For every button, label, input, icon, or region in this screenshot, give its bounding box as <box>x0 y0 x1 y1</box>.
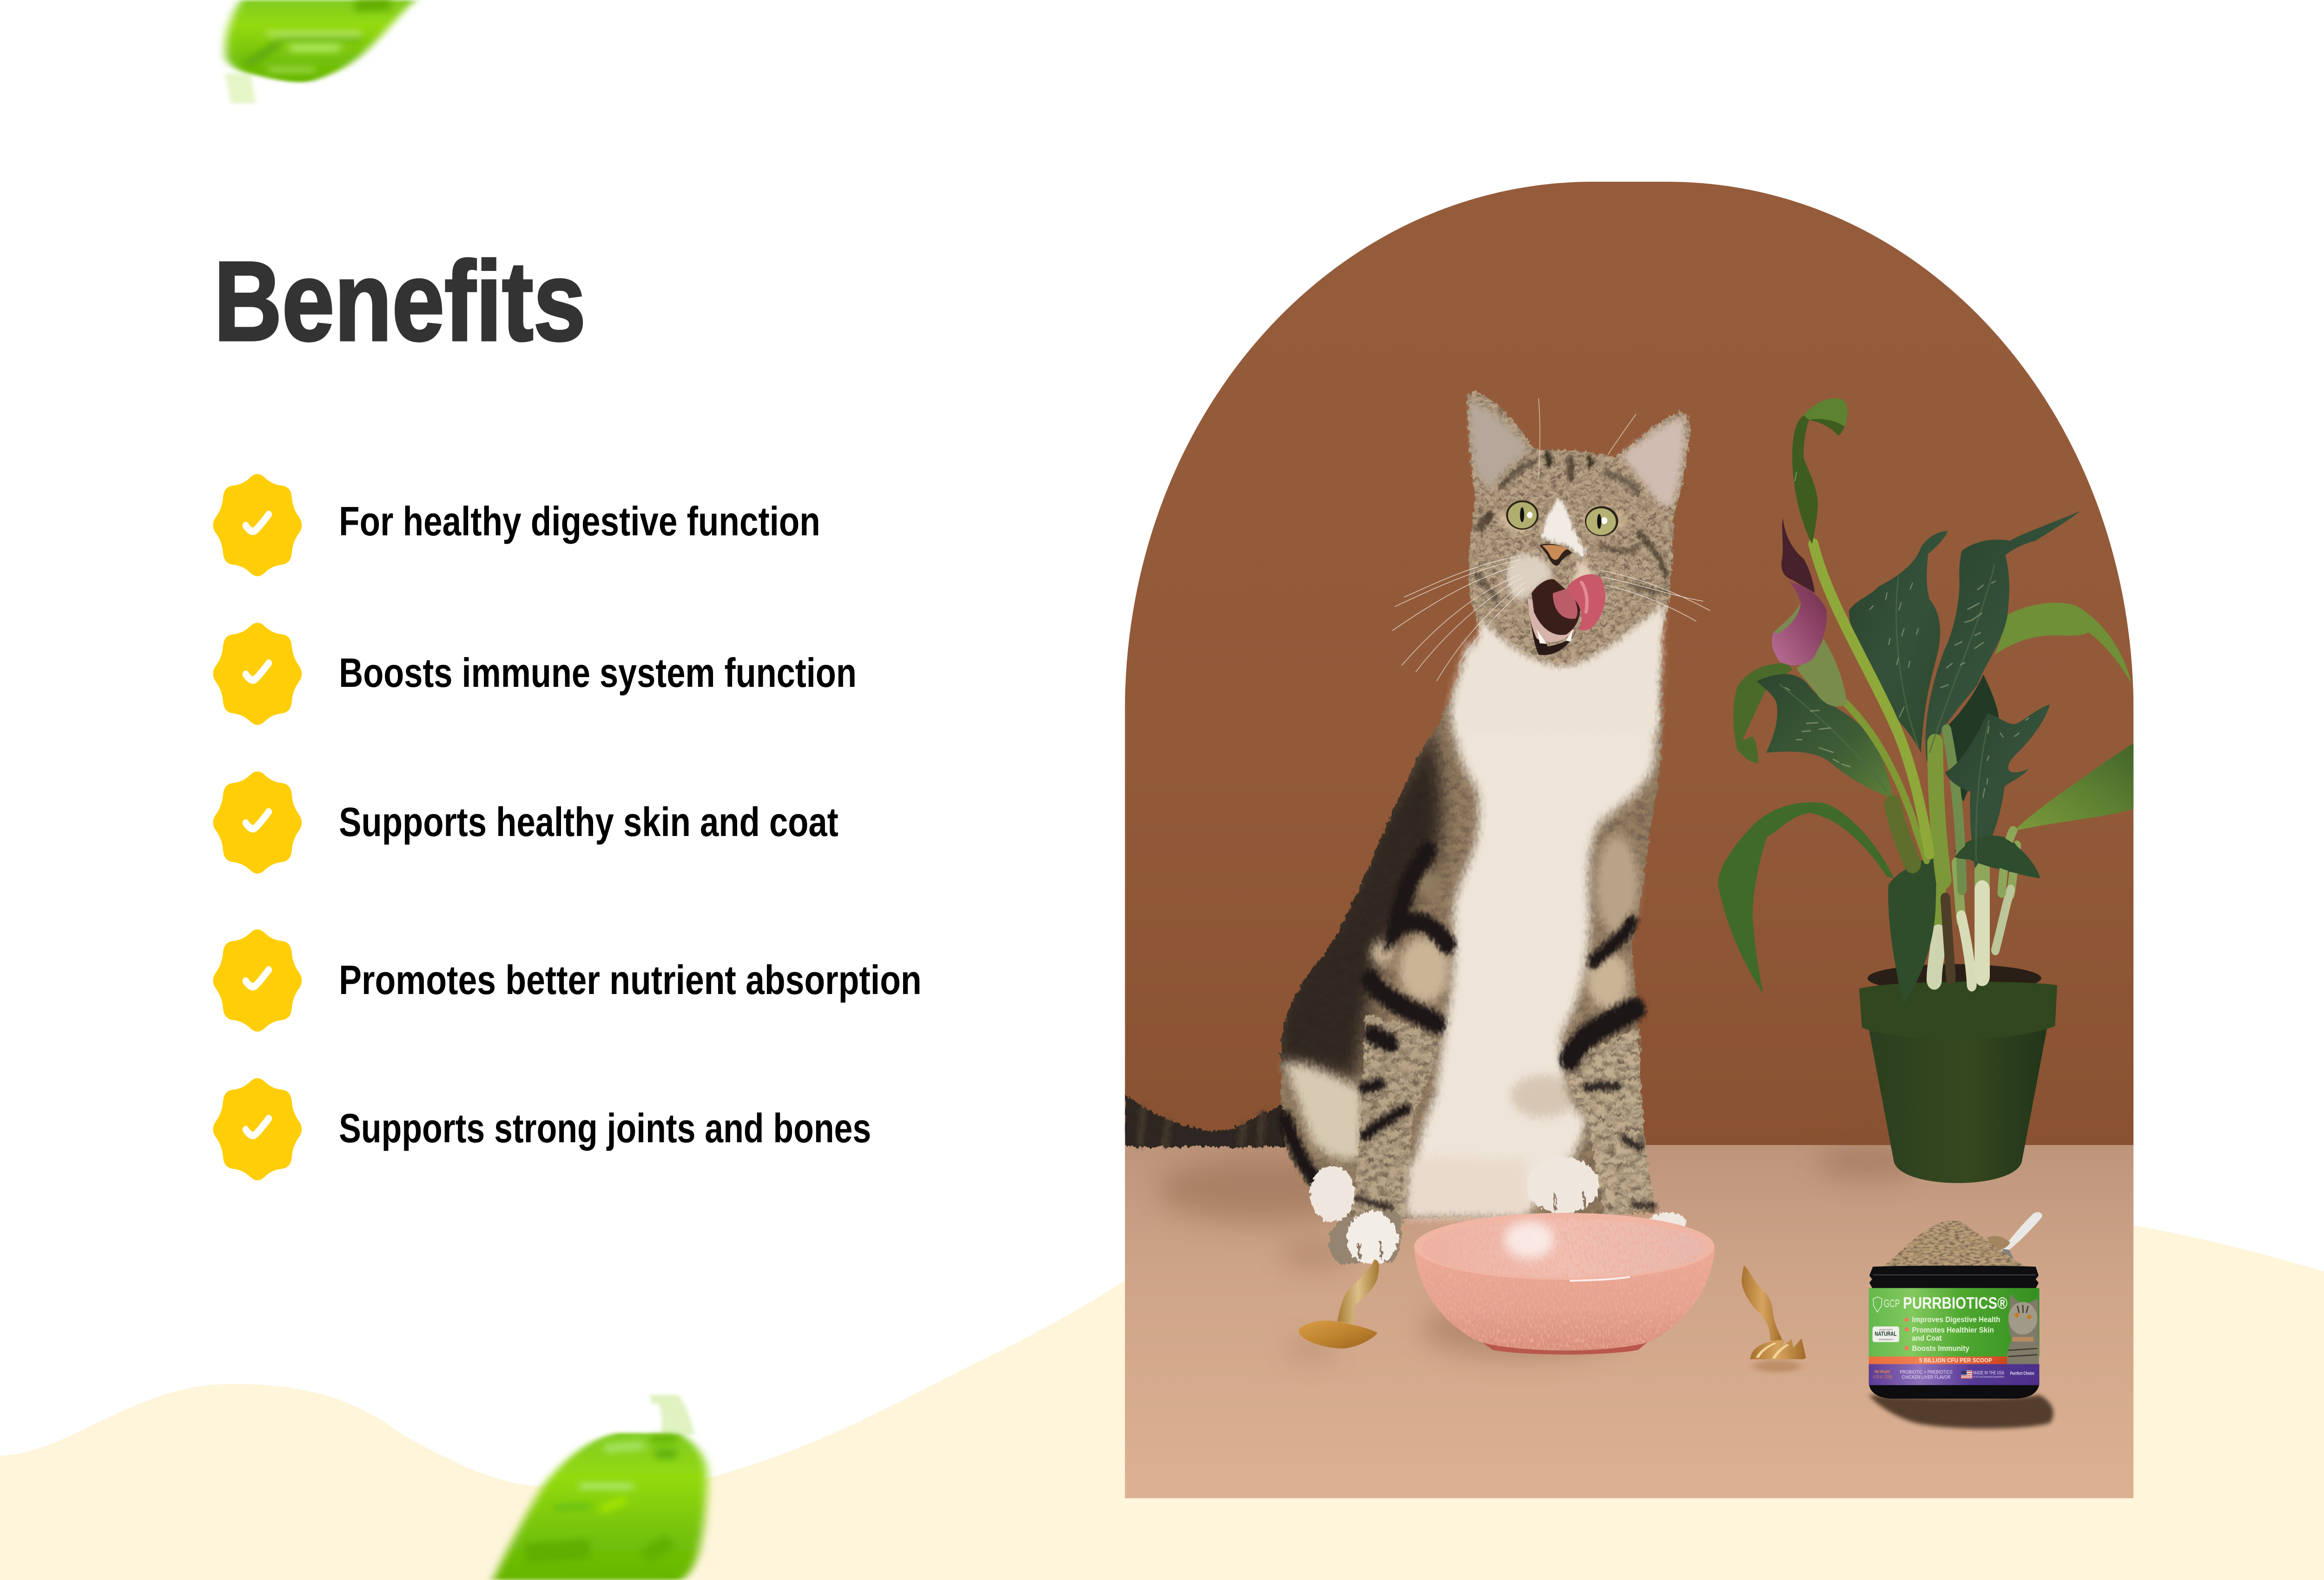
product jar: PURRBIOTICS® <box>1903 1294 2007 1312</box>
flower pink petal <box>1772 581 1827 665</box>
icon: check badge <box>213 771 302 874</box>
purple band text: PROBIOTIC + PREBIOTICS <box>1900 1369 1953 1375</box>
back dark leaf <box>1946 674 1999 802</box>
icon: brand shield <box>1873 1297 1882 1312</box>
cat face details <box>1393 398 1710 681</box>
tongue main <box>1568 574 1605 631</box>
benefit item 5 <box>213 1078 871 1180</box>
fork <box>1742 1265 1806 1372</box>
bowl highlight <box>1504 1221 1554 1258</box>
purple band text: 4.23 oz. (120g) <box>1873 1374 1892 1379</box>
eye left <box>1506 500 1538 530</box>
nose <box>1540 544 1572 566</box>
flower: calla lily <box>1772 518 1848 706</box>
label green <box>1869 1288 2040 1356</box>
spoon handle <box>1337 1259 1379 1324</box>
cat <box>1125 392 1710 1265</box>
flower dark back petal <box>1782 518 1815 593</box>
plant pot and soil <box>1859 836 2057 1183</box>
label orange band <box>1869 1356 2007 1364</box>
pot rim <box>1859 981 2057 1040</box>
jar benefits text: and Coat <box>1912 1334 1942 1343</box>
purple band text: CHICKEN LIVER FLAVOR <box>1901 1375 1951 1380</box>
purple band text: of US and imported ingredients <box>1973 1376 2004 1379</box>
right front paw <box>1527 1157 1599 1214</box>
jar benefits text: Boosts Immunity <box>1912 1344 1969 1353</box>
leaf stem top <box>225 73 256 104</box>
leaf highlights top <box>246 5 390 70</box>
benefit item 4 <box>213 929 922 1032</box>
background wave <box>0 1225 2324 1580</box>
body tabby base <box>1281 644 1663 1221</box>
flower spathe <box>1796 639 1848 706</box>
purple band text <box>1873 1369 2034 1380</box>
centre leaf <box>1849 531 1948 753</box>
soil <box>1868 964 2041 992</box>
natural badge: INGREDIENTS <box>1879 1338 1893 1341</box>
whiskers <box>1393 398 1710 681</box>
CFU text: 5 BILLION CFU PER SCOOP <box>1919 1357 1992 1364</box>
spoon head <box>1299 1321 1378 1349</box>
jar benefits text: Promotes Healthier Skin <box>1912 1325 1994 1334</box>
lower front leaf <box>1888 853 1937 1005</box>
tongue base <box>1553 588 1578 619</box>
bowl rim glint <box>1570 1277 1630 1281</box>
open mouth <box>1527 574 1605 655</box>
back-left paw <box>1310 1165 1355 1222</box>
bowl interior <box>1414 1213 1714 1280</box>
icon: check badge <box>213 474 302 576</box>
far-right paw <box>1649 1212 1686 1231</box>
foreleg right <box>1568 1030 1655 1217</box>
benefit item 2 <box>213 623 857 725</box>
white blaze <box>1541 497 1585 557</box>
natural badge <box>1873 1326 1899 1342</box>
leaf speckles <box>1785 472 2028 797</box>
icon: check badge <box>213 929 302 1032</box>
shadows on table <box>1158 1146 1921 1357</box>
fork shadow <box>1754 1360 1801 1372</box>
small left curl leaf <box>1733 663 1792 763</box>
eye right <box>1585 506 1618 536</box>
body dark flank <box>1273 727 1442 1080</box>
purple band text: Net Weight: <box>1875 1369 1890 1374</box>
icon: check badge <box>213 623 302 725</box>
natural badge: NATURAL <box>1875 1330 1897 1337</box>
flower inner <box>1774 603 1801 634</box>
foreleg left <box>1352 1013 1439 1229</box>
panel: arched photo scene <box>1125 182 2136 1498</box>
leaf midribs <box>1780 564 1994 860</box>
jar lid <box>1869 1265 2039 1288</box>
right lower dark leaf <box>1945 704 2050 869</box>
curled top leaf <box>1792 398 1848 544</box>
cat head fur <box>1457 392 1690 732</box>
benefit text 5: Supports strong joints and bones <box>339 1106 871 1151</box>
belly bottom <box>1406 1157 1529 1217</box>
cat fur layers <box>1125 392 1690 1265</box>
jar benefits text <box>1912 1315 2000 1353</box>
green stem bases <box>1938 837 2017 939</box>
forehead markings <box>1476 456 1666 601</box>
pot body <box>1868 1022 2048 1183</box>
product jar <box>1869 1212 2053 1429</box>
benefit item 3 <box>213 771 838 874</box>
leaf highlights bottom <box>525 1439 677 1557</box>
left front paw tabby <box>1329 1211 1402 1264</box>
benefit text 4: Promotes better nutrient absorption <box>339 957 922 1003</box>
light cheek and blaze <box>1497 510 1626 601</box>
natural badge: MADE WITH <box>1879 1329 1893 1331</box>
leaf: bottom blurred <box>493 1395 707 1580</box>
spoon <box>1299 1259 1379 1349</box>
jar brand text: GCP <box>1884 1297 1900 1310</box>
mouth cavity <box>1532 579 1580 635</box>
jar shadow <box>1869 1395 2053 1429</box>
teeth <box>1537 629 1573 644</box>
title: Benefits <box>214 238 586 364</box>
benefit item 1 <box>213 474 820 576</box>
belly shading <box>1511 1075 1576 1117</box>
bowl foot <box>1477 1338 1652 1355</box>
white chin and throat <box>1457 604 1664 732</box>
near small leaf <box>1955 836 2040 878</box>
benefit text 1: For healthy digestive function <box>339 499 820 544</box>
label cat <box>2007 1293 2039 1364</box>
wall <box>1125 182 2133 1148</box>
jar bullets <box>1904 1317 1909 1350</box>
left big leaf <box>1757 674 1893 798</box>
table <box>1125 1145 2133 1498</box>
purple band text: MADE IN THE USA <box>1973 1370 2005 1376</box>
benefit text 3: Supports healthy skin and coat <box>339 799 838 845</box>
paws <box>1310 1157 1686 1265</box>
ear inner right <box>1621 418 1684 507</box>
scoop <box>1987 1212 2042 1259</box>
cat body <box>1273 644 1686 1265</box>
arched pale right leaf <box>1994 603 2132 684</box>
benefits list <box>213 474 922 1180</box>
lower side leaf <box>1954 836 2040 877</box>
cat tail <box>1125 1094 1287 1147</box>
lower-left arching leaf <box>1718 802 1894 994</box>
tabby stripes <box>1286 851 1655 1208</box>
benefit text 2: Boosts immune system function <box>339 650 857 696</box>
fork handle <box>1742 1265 1783 1341</box>
leaf body bottom <box>493 1433 707 1580</box>
jar benefits text: Improves Digestive Health <box>1912 1315 2000 1324</box>
left front paw white <box>1346 1211 1398 1265</box>
bowl outer <box>1414 1248 1715 1350</box>
jar base <box>1869 1382 2040 1399</box>
white chest and belly <box>1410 644 1661 1212</box>
leaf: top blurred <box>225 0 416 104</box>
plant foliage <box>1718 398 2136 994</box>
icon: check badge <box>213 1078 302 1180</box>
tall right leaf <box>1926 511 2081 763</box>
body light patches <box>1282 835 1639 1160</box>
leaf body top <box>225 0 416 82</box>
fork tines <box>1750 1338 1806 1359</box>
ear inner left <box>1470 401 1529 489</box>
powder pile <box>1879 1220 2030 1269</box>
leaf stem bottom <box>649 1395 694 1435</box>
bowl <box>1414 1213 1715 1355</box>
pale stems <box>1934 890 2011 985</box>
stems <box>1814 544 2013 893</box>
icon: usa flag <box>1961 1370 1972 1379</box>
head base <box>1467 392 1690 671</box>
label purple band <box>1869 1364 2040 1385</box>
lower lip <box>1527 601 1576 655</box>
right lower bright leaf <box>2012 741 2136 833</box>
purple band text: Purrfect Choice <box>2010 1371 2034 1376</box>
plant <box>1718 398 2136 1183</box>
